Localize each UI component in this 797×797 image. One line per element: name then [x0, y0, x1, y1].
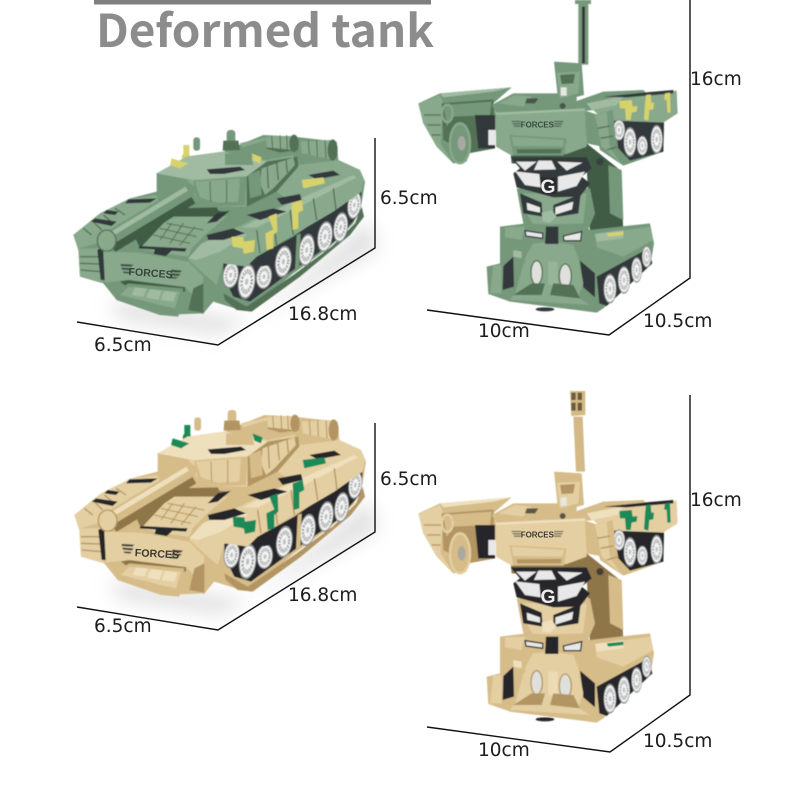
tank forces label: FORCES — [128, 266, 173, 281]
height label: 16cm — [690, 69, 742, 90]
height label: 6.5cm — [380, 188, 438, 209]
panel: sand tank with dimensions — [74, 410, 438, 637]
depth label: 10.5cm — [643, 731, 712, 752]
panel: green robot with dimensions — [418, 0, 742, 342]
tank shadow — [110, 220, 378, 335]
robot chest letter: G — [540, 587, 556, 608]
length label: 16.8cm — [288, 585, 357, 606]
robot cannon — [570, 391, 585, 472]
height label: 16cm — [690, 490, 742, 511]
width label: 10cm — [478, 321, 530, 342]
dimension lines — [427, 395, 690, 752]
dimension lines — [77, 138, 375, 345]
robot forces label: FORCES — [521, 530, 555, 539]
depth label: 10.5cm — [643, 311, 712, 332]
panel: sand robot with dimensions — [418, 391, 742, 761]
robot chest letter: G — [540, 177, 556, 198]
tank forces label: FORCES — [134, 547, 179, 561]
dimension lines — [77, 423, 375, 630]
sand robot photo illustration — [418, 391, 678, 723]
tank shadow — [110, 500, 378, 615]
dimension lines — [427, 0, 690, 335]
robot cannon — [575, 0, 591, 65]
panel: green tank with dimensions — [73, 130, 438, 356]
width label: 10cm — [478, 740, 530, 761]
sand tank photo illustration — [74, 410, 366, 597]
green robot photo illustration — [418, 0, 678, 313]
depth label: 6.5cm — [94, 335, 152, 356]
depth label: 6.5cm — [94, 616, 152, 637]
green tank photo illustration — [73, 130, 365, 317]
length label: 16.8cm — [288, 304, 357, 325]
height label: 6.5cm — [380, 469, 438, 490]
robot forces label: FORCES — [521, 120, 555, 129]
